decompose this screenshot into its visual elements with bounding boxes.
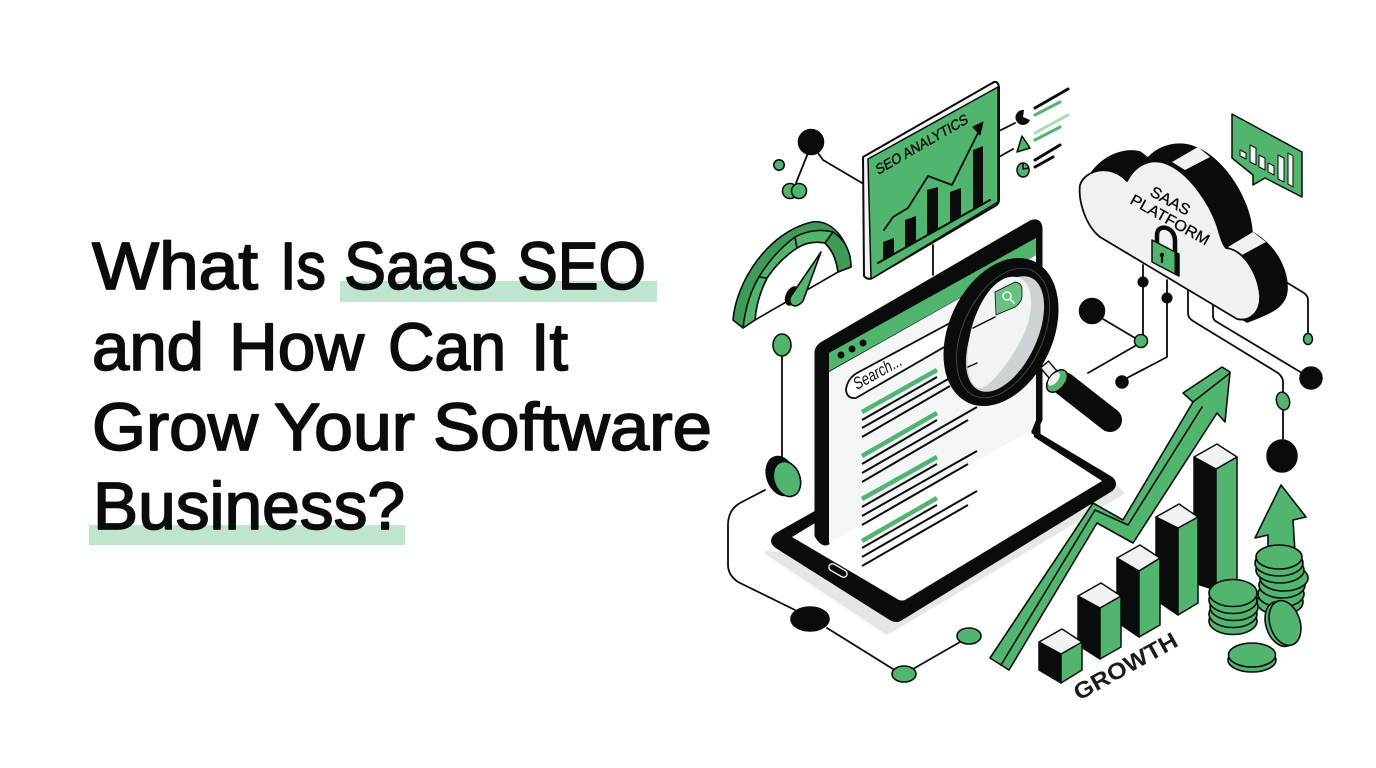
panel trend arrow <box>884 129 980 230</box>
growth arrow <box>990 367 1230 670</box>
speech bubble chart <box>1232 114 1302 197</box>
panel green face <box>868 87 998 279</box>
bar 3 <box>1117 545 1160 637</box>
handle stem <box>1044 364 1056 378</box>
search placeholder: Search... <box>850 351 905 393</box>
title line 2: How <box>229 310 365 385</box>
gauge baseline <box>755 272 838 320</box>
title line 2: Can <box>388 310 506 385</box>
bubble <box>1232 114 1302 197</box>
handle stem light <box>1045 365 1055 377</box>
title line 2: It <box>531 310 568 385</box>
title line 3: Software <box>433 390 712 465</box>
speech connectors <box>1088 265 1308 440</box>
right coin stack <box>1255 545 1308 615</box>
collar <box>1043 366 1071 396</box>
highlight: Business <box>89 525 405 545</box>
list lines black <box>1035 89 1068 167</box>
gauge back <box>733 222 851 328</box>
icon: triangle <box>1017 136 1030 152</box>
gauge segment 2 <box>759 237 797 278</box>
title line 3 <box>92 390 712 465</box>
circuit lines: left <box>728 123 1015 669</box>
title <box>89 229 712 545</box>
cloud nodes <box>1080 277 1322 472</box>
mini icons and list lines <box>1015 89 1068 177</box>
title line 1 <box>92 229 646 304</box>
title line 2: and <box>92 310 204 385</box>
lens rim gray <box>950 264 1060 404</box>
ring <box>921 239 1081 425</box>
up arrow <box>1255 485 1306 552</box>
icon: pie <box>1015 110 1030 125</box>
arrow inner line <box>1001 407 1202 665</box>
panel body <box>863 82 999 279</box>
gauge needle <box>790 252 821 306</box>
cloud label SAAS: SAAS <box>1147 184 1193 219</box>
result lines: black <box>862 377 977 566</box>
panel: SEO analytics <box>863 82 999 279</box>
growth label: GROWTH <box>1069 627 1182 705</box>
cloud highlight stripe lower <box>1228 232 1266 255</box>
lens search icon <box>1003 292 1014 303</box>
gauge segment 1 <box>743 277 767 328</box>
up arrow and coins <box>1209 485 1308 672</box>
base surface <box>792 400 1102 600</box>
title line 3: Your <box>274 390 415 465</box>
title line 1: SEO <box>517 229 646 304</box>
growth bars <box>1039 444 1237 683</box>
gauge segment 3 <box>795 230 833 248</box>
magnifying glass <box>921 239 1110 425</box>
panel bars <box>883 146 983 260</box>
window dots <box>838 340 866 358</box>
cloud label PLATFORM: PLATFORM <box>1127 192 1212 249</box>
lens glass <box>968 277 1031 388</box>
cloud front face <box>1080 161 1260 320</box>
left circuit nodes <box>761 334 981 682</box>
list line light green <box>1035 115 1068 133</box>
title line 3: Grow <box>92 390 259 465</box>
screen <box>815 220 1042 566</box>
arrow head ridge <box>1193 373 1230 402</box>
gauge segment 4 <box>825 232 851 272</box>
screen green header <box>829 238 1036 371</box>
cloud extrusion <box>1092 144 1287 322</box>
highlight: SaaS SEO <box>340 281 657 302</box>
title line 2 <box>92 310 568 385</box>
standing coin <box>1260 596 1306 651</box>
lens search bar line <box>968 317 995 367</box>
base home button <box>828 562 848 579</box>
panel label: SEO ANALYTICS <box>874 110 970 178</box>
cloud highlight stripe upper <box>1172 147 1210 170</box>
lock <box>1152 228 1179 276</box>
arrow body <box>990 367 1230 670</box>
icon: circle chart <box>1017 163 1029 177</box>
tablet shadow <box>767 470 1122 633</box>
result lines: green <box>862 370 937 541</box>
handle <box>1064 384 1110 420</box>
illustration <box>728 82 1322 705</box>
base frame <box>772 430 1115 621</box>
flat coin <box>1228 643 1276 672</box>
bar 1 <box>1039 629 1082 683</box>
screen frame <box>815 220 1042 545</box>
collar inner <box>1046 370 1062 388</box>
gauge hub <box>783 285 801 307</box>
search bar <box>846 323 965 398</box>
bar 2 <box>1078 583 1121 659</box>
cloud: SaaS platform <box>1080 144 1322 472</box>
left coin stack <box>1209 580 1258 634</box>
title line 1: Is <box>280 229 326 304</box>
bar 4 <box>1156 504 1198 615</box>
title line 1: SaaS <box>344 229 498 304</box>
title line 1: What <box>92 229 258 304</box>
panel baseline <box>878 200 990 263</box>
ring highlight <box>938 254 1068 412</box>
gauge <box>733 222 851 328</box>
screen page <box>829 255 1036 543</box>
title line 4: Business? <box>93 469 405 544</box>
tablet base <box>772 400 1115 621</box>
bar 5 <box>1194 444 1237 600</box>
list lines green <box>1035 102 1060 140</box>
panel arrowhead <box>973 122 983 135</box>
bubble bars <box>1240 145 1293 187</box>
lens search button <box>995 282 1022 315</box>
network node dots: upper left <box>774 130 824 198</box>
